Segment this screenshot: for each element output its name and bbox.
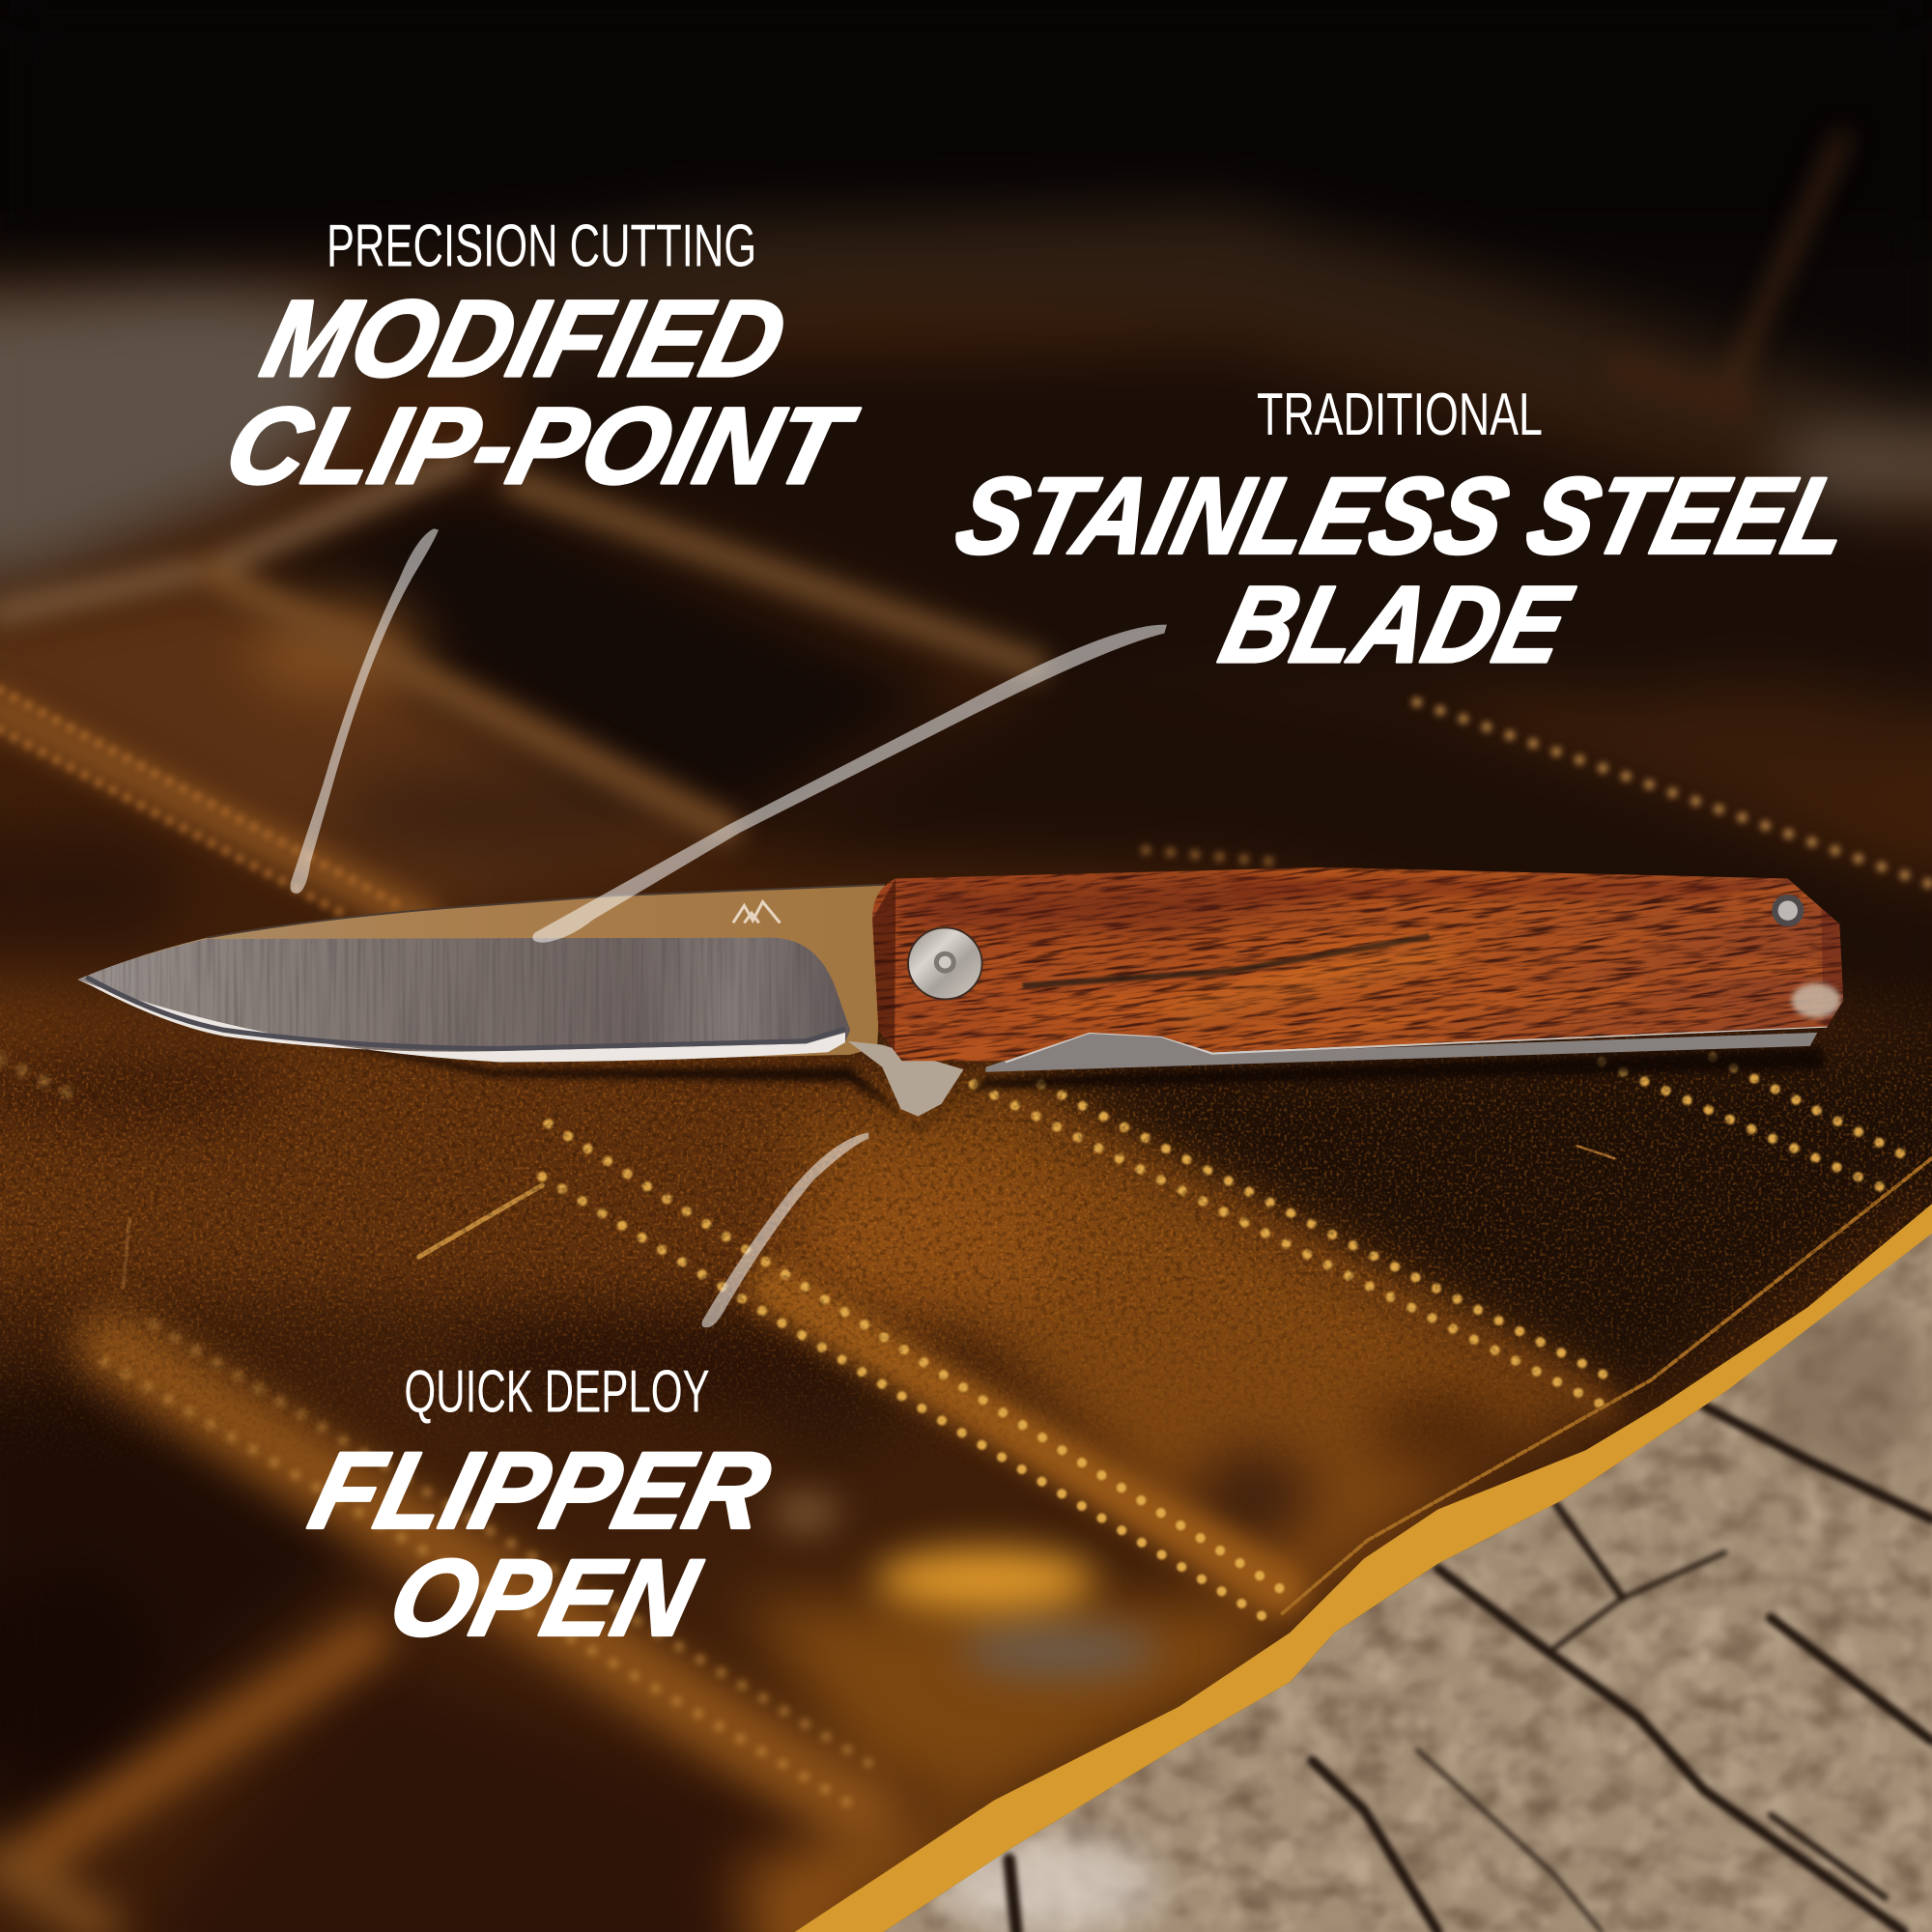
blade grind xyxy=(77,938,850,1062)
wooden handle scale xyxy=(872,867,1843,1061)
callout: flipper open xyxy=(299,1132,868,1659)
heading: clip-point: CLIP-POINT xyxy=(214,386,867,507)
logo on blade xyxy=(733,902,780,923)
leather edge xyxy=(795,1204,1932,1932)
label: quick deploy: QUICK DEPLOY xyxy=(404,1358,710,1426)
arrow stroke xyxy=(532,625,1167,943)
blade cutting edge xyxy=(77,980,845,1062)
heading: flipper: FLIPPER xyxy=(299,1431,781,1551)
wood log xyxy=(863,1208,1932,1932)
callout: stainless steel blade xyxy=(532,381,1862,943)
heading: modified: MODIFIED xyxy=(251,279,797,400)
label: traditional: TRADITIONAL xyxy=(1257,381,1543,448)
knife xyxy=(77,867,1843,1134)
lower liner xyxy=(985,1033,1817,1072)
log cracks xyxy=(1009,1406,1932,1932)
leather stitching xyxy=(0,690,1932,1811)
callout: modified clip-point xyxy=(214,213,867,894)
blade spine and tang xyxy=(77,885,885,1062)
heading: open: OPEN xyxy=(379,1538,711,1659)
arrow stroke xyxy=(291,528,439,894)
label: precision cutting: PRECISION CUTTING xyxy=(327,213,756,280)
heading: blade: BLADE xyxy=(1210,564,1581,686)
blade spine edge xyxy=(207,885,885,938)
heading: stainless steel: STAINLESS STEEL xyxy=(946,456,1862,577)
pivot screw xyxy=(908,927,982,999)
knife shadow xyxy=(111,998,1824,1131)
flipper tab xyxy=(848,1041,963,1117)
arrow stroke xyxy=(702,1132,868,1327)
rear screw xyxy=(1772,895,1804,926)
